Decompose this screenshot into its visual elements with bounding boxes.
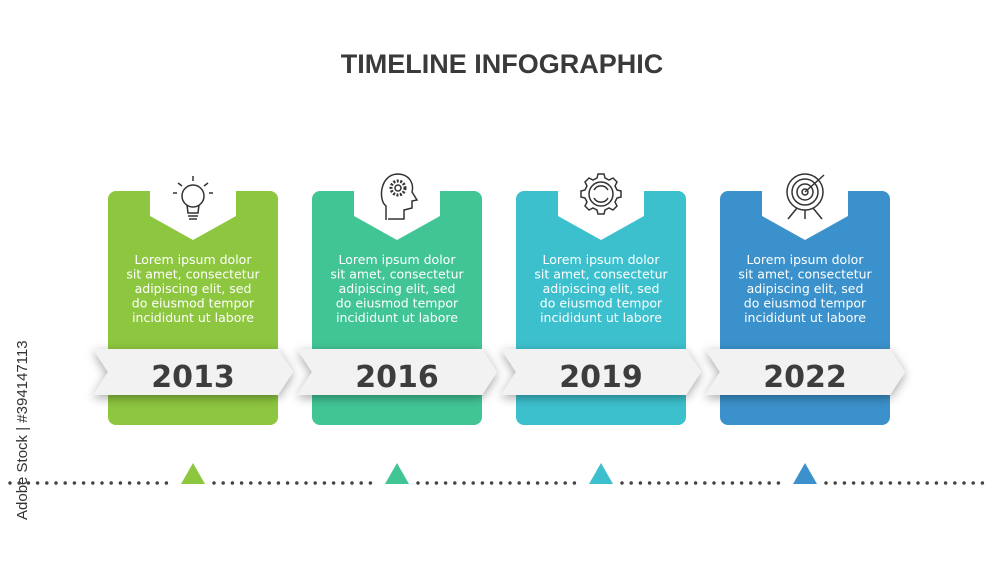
- text block: do eiusmod tempor: [540, 296, 663, 310]
- ribbon year: [705, 349, 905, 395]
- ribbon year: [297, 349, 497, 395]
- card 2: 2016: 2016: [355, 360, 439, 395]
- text block: Lorem ipsum dolor: [339, 252, 456, 267]
- text block: Lorem ipsum dolor: [543, 252, 660, 267]
- card 1: 2013: 2013: [151, 360, 235, 395]
- icon: gear with arrows: [581, 174, 621, 214]
- icon: target: [787, 174, 824, 219]
- text block: do eiusmod tempor: [744, 296, 867, 310]
- ribbon year: [501, 349, 701, 395]
- text block: incididunt ut labore: [540, 310, 662, 325]
- text block: sit amet, consectetur: [126, 266, 261, 282]
- triangle marker: [181, 463, 205, 484]
- triangle marker: [589, 463, 613, 484]
- title: TIMELINE INFOGRAPHIC: [341, 49, 663, 79]
- text block: adipiscing elit, sed: [135, 281, 251, 296]
- text block: Lorem ipsum dolor: [135, 252, 252, 267]
- card 1: 2013: [93, 176, 293, 484]
- ribbon year: [93, 349, 293, 395]
- triangle marker: [793, 463, 817, 484]
- text block: incididunt ut labore: [132, 310, 254, 325]
- dotted timeline: [10, 481, 990, 485]
- card 4: 2022: [705, 174, 905, 484]
- text block: Lorem ipsum dolor: [747, 252, 864, 267]
- text block: adipiscing elit, sed: [747, 281, 863, 296]
- text block: do eiusmod tempor: [336, 296, 459, 310]
- icon: head with gear: [381, 174, 417, 220]
- card 3: 2019: 2019: [559, 360, 643, 395]
- text block: do eiusmod tempor: [132, 296, 255, 310]
- text block: incididunt ut labore: [744, 310, 866, 325]
- icon: light bulb: [173, 176, 213, 219]
- text block: sit amet, consectetur: [330, 266, 465, 282]
- watermark side text: Adobe Stock | #394147113: [14, 340, 31, 520]
- card 4: 2022: 2022: [763, 360, 847, 395]
- text block: adipiscing elit, sed: [339, 281, 455, 296]
- text block: adipiscing elit, sed: [543, 281, 659, 296]
- text block: sit amet, consectetur: [738, 266, 873, 282]
- text block: sit amet, consectetur: [534, 266, 669, 282]
- triangle marker: [385, 463, 409, 484]
- text block: incididunt ut labore: [336, 310, 458, 325]
- card 2: 2016: [297, 174, 497, 484]
- card 3: 2019: [501, 174, 701, 484]
